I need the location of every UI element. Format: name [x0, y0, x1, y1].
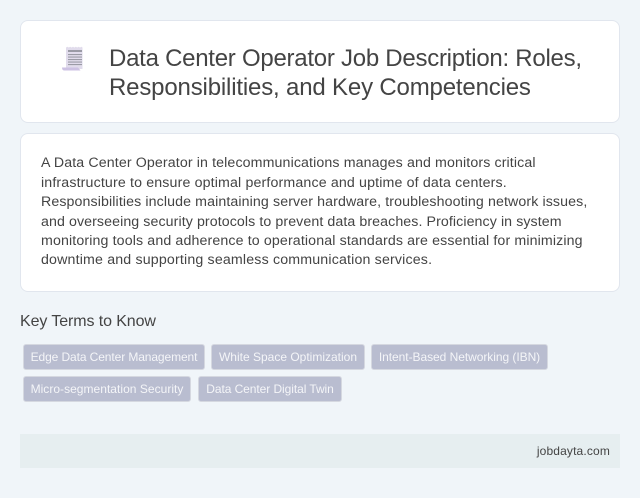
description text: and overseeing security protocols to prevent data breaches. Proficiency in system: [41, 214, 562, 230]
tag: Intent-Based Networking: [371, 344, 548, 370]
title: Responsibilities, and Key Competencies: [109, 74, 531, 101]
icon: document scroll: [62, 46, 82, 70]
description text: A Data Center Operator in telecommunications manages and monitors critical: [41, 155, 536, 171]
tag: Edge Data Center Management: [23, 344, 205, 370]
description text: [41, 155, 587, 268]
tag: White Space Optimization: White Space Optimization: [219, 350, 357, 364]
footer source: jobdayta.com: [537, 444, 610, 458]
description text: Responsibilities include maintaining server hardware, troubleshooting network issues,: [41, 194, 587, 210]
title: Data Center Operator Job Description: Roles,: [109, 45, 582, 72]
description text: downtime and supporting seamless communication services.: [41, 252, 432, 268]
description card: [20, 133, 620, 292]
footer bar: [20, 434, 620, 468]
title: [109, 45, 582, 101]
tag: Edge Data Center Management: Edge Data Center Management: [31, 350, 197, 364]
description text: infrastructure to ensure optimal performance and uptime of data centers.: [41, 175, 507, 191]
tag: Data Center Digital Twin: Data Center Digital Twin: [206, 382, 334, 396]
tag: Micro-segmentation Security: Micro-segmentation Security: [31, 382, 183, 396]
tag: White Space Optimization: [211, 344, 365, 370]
tag: Micro-segmentation Security: [23, 376, 191, 402]
key terms heading: Key Terms to Know: [20, 313, 156, 330]
description text: monitoring tools and adherence to operational standards are essential for minimizing: [41, 233, 583, 249]
tag: Data Center Digital Twin: [198, 376, 342, 402]
header card: [20, 20, 620, 123]
tag: Intent-Based Networking: Intent-Based Networking (IBN): [379, 350, 540, 364]
